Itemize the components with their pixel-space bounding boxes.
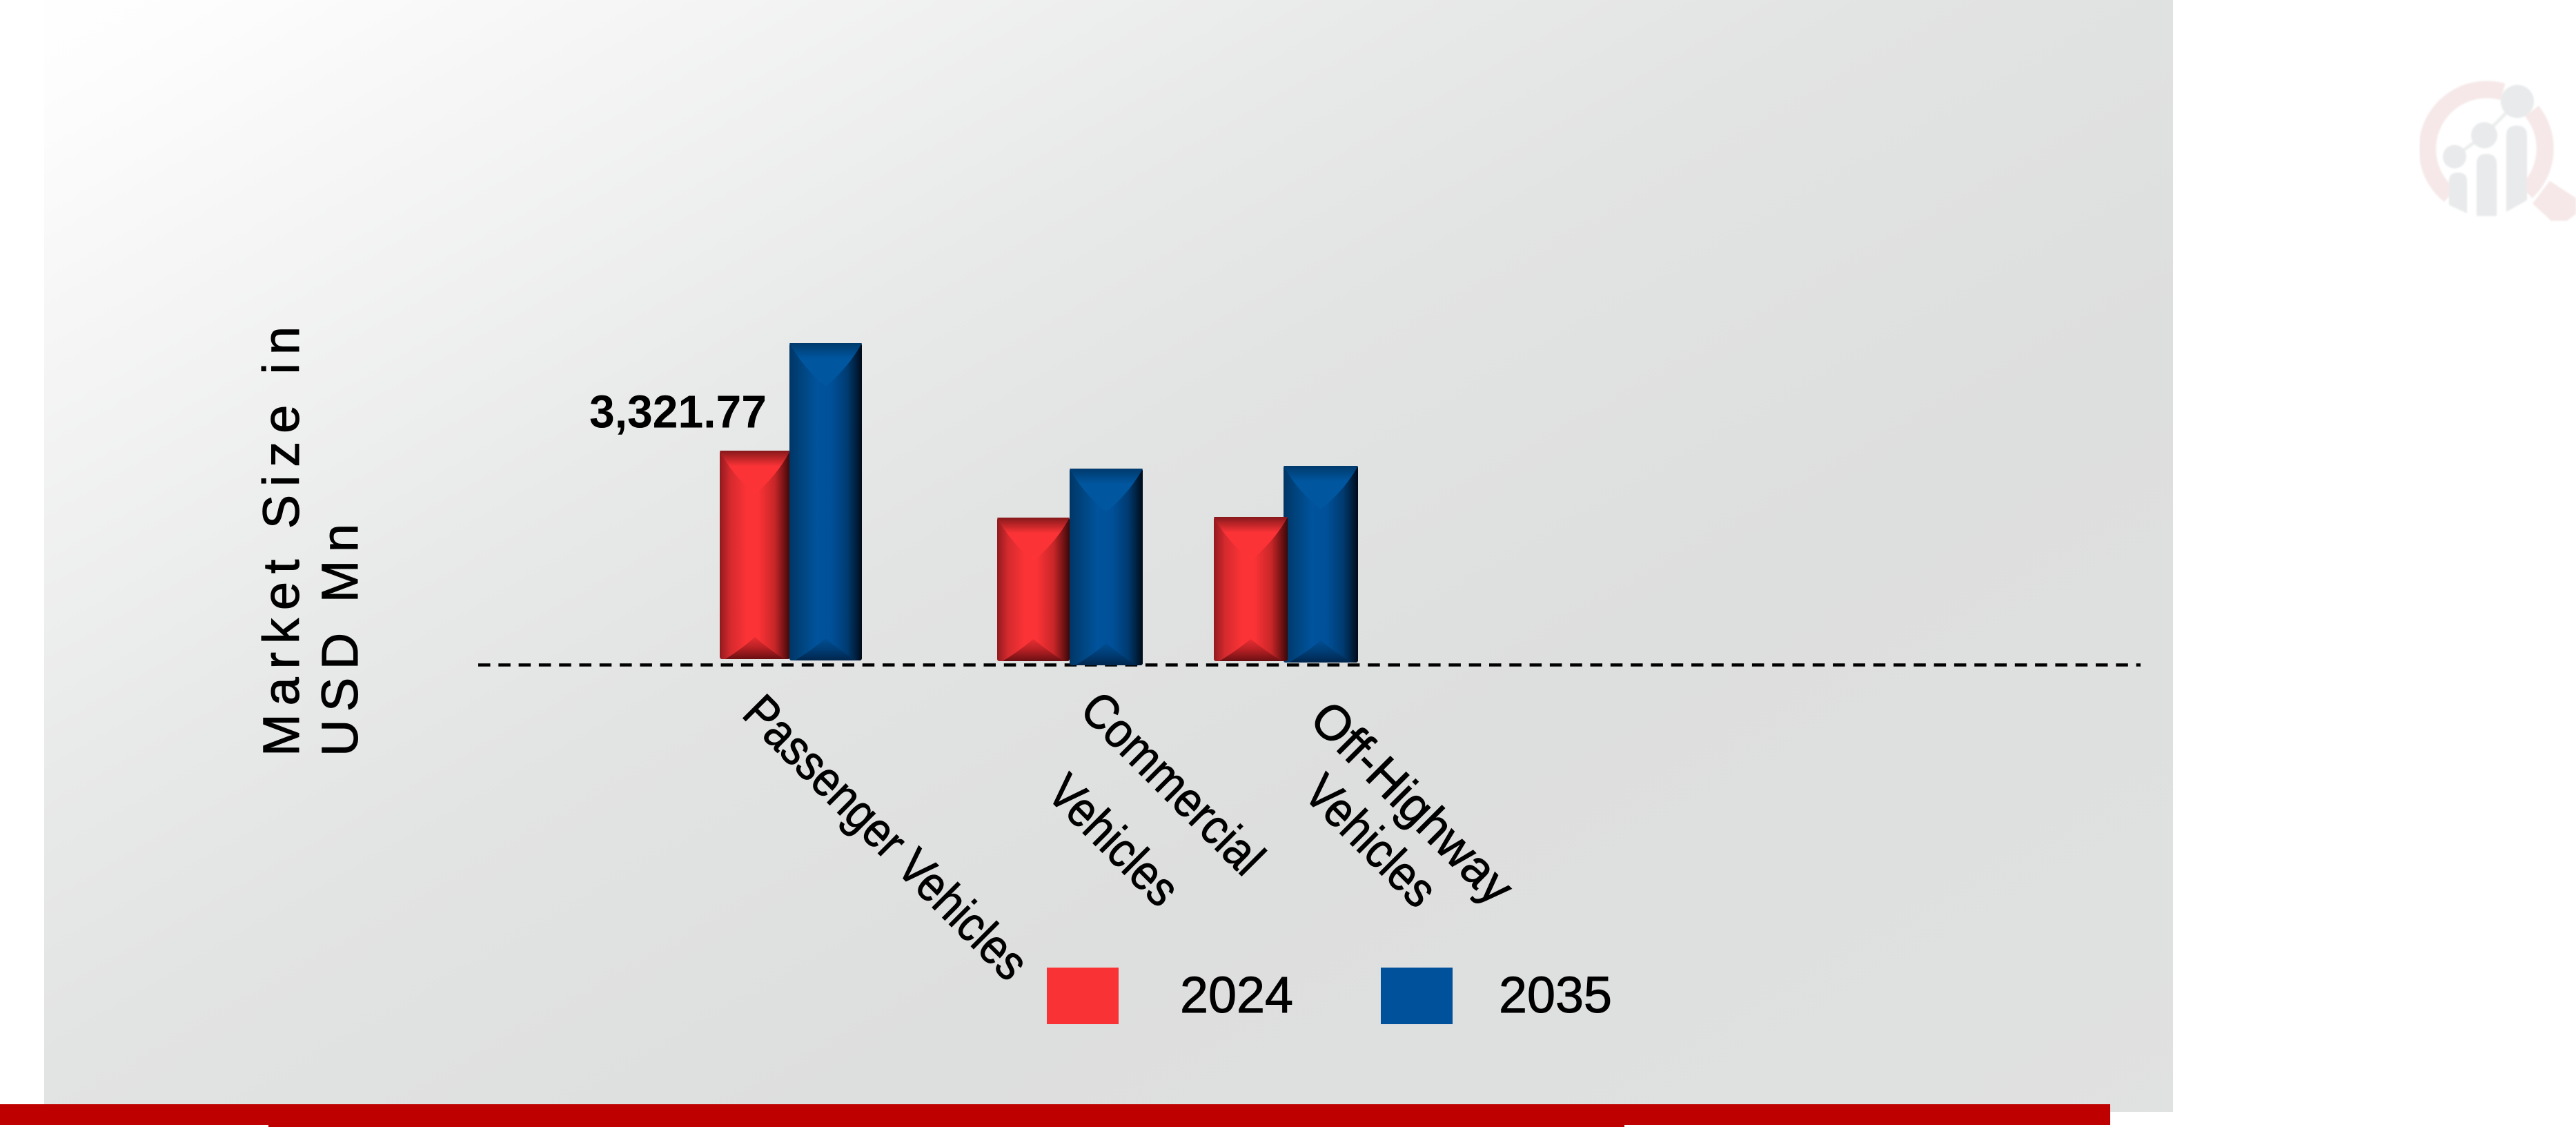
bar: Commercial Vehicles 2024 — [997, 518, 1070, 661]
category label: Commercial Vehicles: Vehicles — [1037, 764, 1190, 917]
bar: Off-Highway Vehicles 2035 — [1284, 466, 1358, 663]
bar: Off-Highway Vehicles 2024 — [1214, 517, 1288, 661]
baseline: dashed axis — [478, 663, 2141, 667]
y-axis title: USD Mn — [311, 524, 368, 756]
category label: Off-Highway Vehicles: Off-Highway — [1300, 691, 1524, 915]
bar: Commercial Vehicles 2035 — [1070, 469, 1143, 665]
bar: Passenger Vehicles 2035 — [789, 343, 862, 660]
value label: 3,321.77: 3,321.77 — [589, 386, 767, 438]
legend swatch: 2035 — [1381, 968, 1453, 1024]
category label: Passenger Vehicles: Passenger Vehicles — [733, 685, 1039, 991]
legend label: 2024: 2024 — [1180, 966, 1293, 1023]
y-axis title — [253, 326, 368, 756]
category label: Commercial Vehicles: Commercial — [1070, 681, 1275, 886]
legend swatch: 2024 — [1047, 968, 1119, 1024]
logo watermark — [2428, 85, 2576, 221]
bar: Passenger Vehicles 2024 — [720, 451, 790, 659]
category label: Off-Highway Vehicles: Vehicles — [1294, 764, 1448, 918]
legend — [1047, 966, 1612, 1024]
y-axis title: Market Size in — [253, 326, 310, 756]
footer bar — [0, 1104, 2110, 1127]
legend label: 2035: 2035 — [1499, 966, 1612, 1023]
